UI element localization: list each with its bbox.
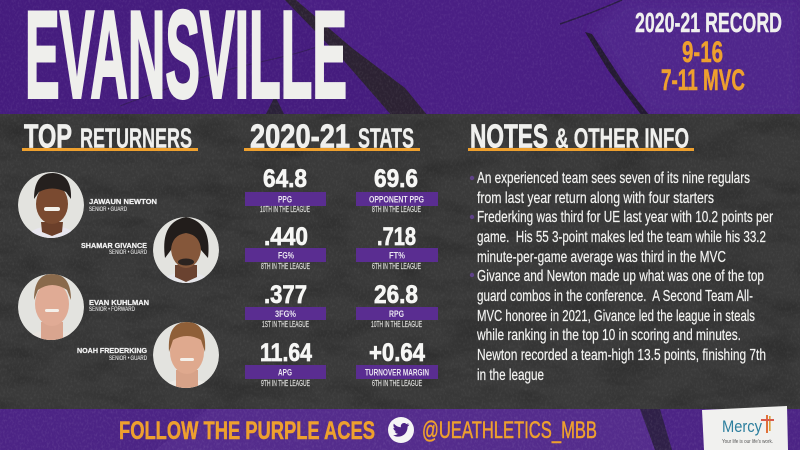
player label: Evan Kuhlman: SENIOR • FORWARD [89,306,135,313]
panel: notes and other info [468,118,773,384]
heading: top returners [22,118,198,154]
stat: turnover margin [356,339,438,388]
Mercy wordmark: Mercy [722,417,762,436]
bottom purple footer background [0,409,800,450]
stat: APG: 9TH IN THE LEAGUE [261,379,310,388]
stat: FT%: FT% [389,250,405,262]
heading: notes: NOTES [470,118,548,154]
stat: turnover margin: TURNOVER MARGIN [365,368,429,378]
notes text [476,170,773,384]
stat: FG%: .440 [264,223,308,251]
stat: APG [245,339,326,388]
icon: Mercy cross [761,415,774,433]
dark chalkboard panel background [0,114,800,409]
stat: FT%: .718 [377,223,416,251]
notes text: in the league [477,367,544,384]
Mercy tagline: Your life is our life's work. [722,439,773,445]
stat: FT%: 6TH IN THE LEAGUE [372,262,421,271]
player label: Jawaun Newton [89,197,157,213]
player label: Jawaun Newton: SENIOR • GUARD [89,206,127,213]
player label: Noah Frederking: SENIOR • GUARD [109,355,147,362]
heading: stats: STATS [358,122,414,154]
player label: Evan Kuhlman [89,298,149,313]
top purple banner background [0,0,800,116]
stat: PPG: 64.8 [263,165,307,193]
portrait: Shamar Givance [153,217,219,283]
stat: FG% [245,223,326,271]
portrait: Noah Frederking [153,322,219,388]
conference record: 7-11 MVC [661,64,745,97]
heading: top returners: RETURNERS [80,122,192,154]
heading: top returners: TOP [24,118,72,154]
stat: 3FG%: 1ST IN THE LEAGUE [262,320,309,329]
stat: opponent PPG: OPPONENT PPG [369,194,424,206]
heading: stats [244,118,420,154]
stat: PPG: 10TH IN THE LEAGUE [260,205,310,214]
notes text: from last year return along with four starters [477,190,714,207]
stat: 3FG%: 3FG% [275,309,296,320]
stat: opponent PPG [356,165,438,214]
stat: 3FG% [245,281,326,329]
stat: 3FG%: .377 [264,281,307,309]
sponsor logo: Mercy [702,406,788,450]
stat: APG: APG [278,368,292,378]
stat: opponent PPG: 8TH IN THE LEAGUE [372,205,421,214]
panel: 2020-21 stats [244,118,438,388]
player label: Shamar Givance: SENIOR • GUARD [109,249,147,256]
overall record: 9-16 [682,36,723,69]
player label: Noah Frederking [77,346,147,362]
stat: turnover margin: +0.64 [369,339,425,367]
player label: Jawaun Newton: JAWAUN NEWTON [89,197,157,206]
stat: FG%: FG% [278,250,294,262]
footer callout: follow the purple aces: FOLLOW THE PURPLE ACES [119,417,375,445]
stat: RPG: RPG [389,309,404,320]
player label: Shamar Givance: SHAMAR GIVANCE [81,241,147,250]
stat: RPG [356,281,438,329]
player label: Shamar Givance [81,241,147,256]
footer handle: @UEATHLETICS_MBB [422,417,597,444]
stat: opponent PPG: 69.6 [374,165,418,193]
bullet markers [470,176,474,277]
stat: FG%: 8TH IN THE LEAGUE [261,262,310,271]
stat: RPG: 26.8 [374,281,418,309]
heading: stats: 2020-21 [250,118,350,154]
record panel [635,7,782,97]
player label: Noah Frederking: NOAH FREDERKING [77,346,147,355]
panel: top returners [18,118,219,403]
stat: PPG: PPG [278,194,292,206]
player label: Evan Kuhlman: EVAN KUHLMAN [89,298,149,307]
stat: turnover margin: 6TH IN THE LEAGUE [372,379,422,388]
icon: twitter bird [388,417,414,443]
heading: notes: & OTHER INFO [555,122,689,154]
notes text: minute-per-game average was third in the MVC [477,249,726,266]
heading: notes [468,118,694,154]
portrait: Jawaun Newton [18,172,84,238]
portrait: Evan Kuhlman [18,274,84,340]
stat: APG: 11.64 [260,339,312,367]
stat: RPG: 10TH IN THE LEAGUE [371,320,422,329]
stat: FT% [356,223,438,271]
stat: PPG [245,165,326,214]
